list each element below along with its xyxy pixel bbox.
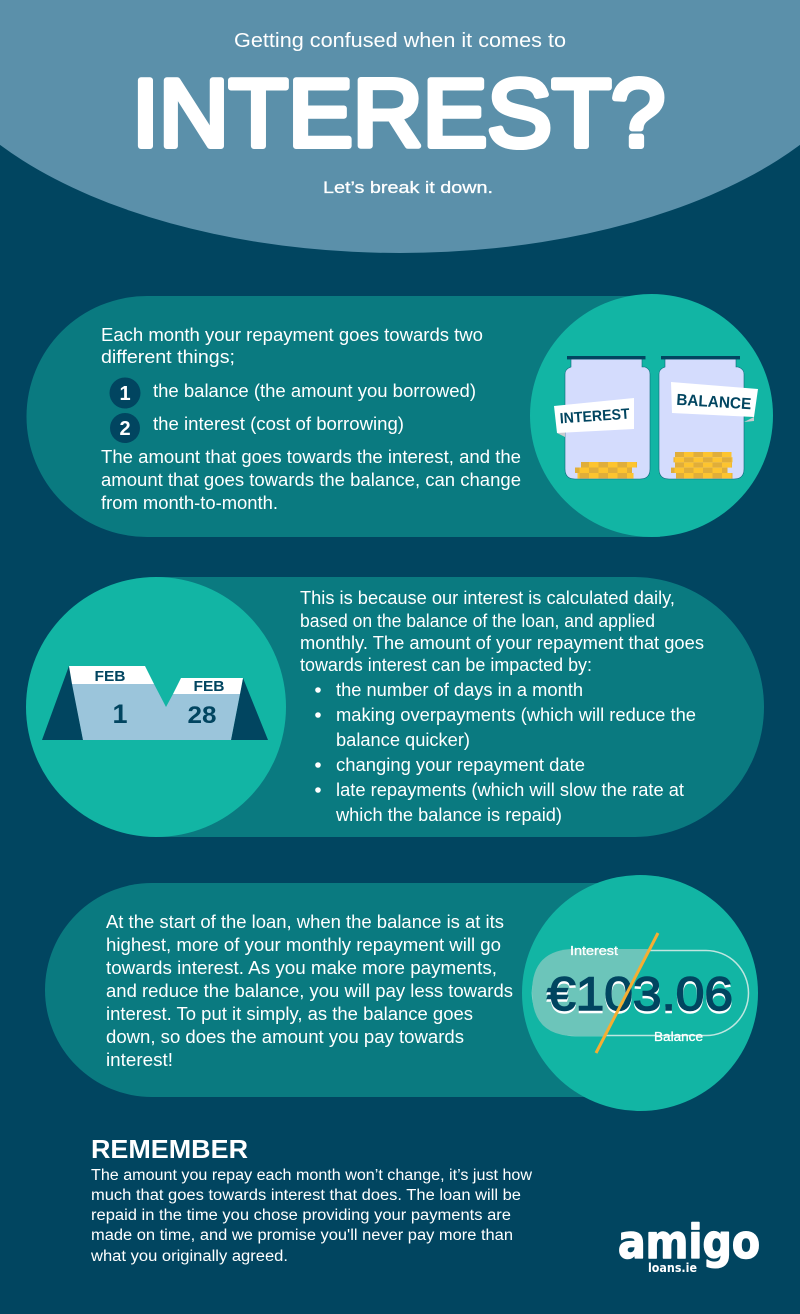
interest jar: INTEREST	[559, 406, 630, 427]
logo: amigo loans.ie: loans.ie	[648, 1260, 697, 1275]
panel 2 intro text	[300, 588, 704, 675]
balance jar: BALANCE	[676, 392, 752, 413]
balance jar	[659, 356, 758, 479]
bullet list: late repayments (which will slow the rate at	[336, 780, 684, 800]
panel 1 closing text: The amount that goes towards the interest, and the	[101, 447, 521, 467]
remember heading: REMEMBER	[91, 1134, 248, 1164]
panel 3 text: and reduce the balance, you will pay less towards	[106, 981, 513, 1001]
panel 1 closing text: amount that goes towards the balance, can change	[101, 470, 521, 490]
icon: repayment split pill: €103.06	[547, 967, 733, 1020]
remember text: made on time, and we promise you'll never pay more than	[91, 1227, 513, 1244]
remember text: repaid in the time you chose providing your payments are	[91, 1207, 511, 1224]
panel 2 intro text: based on the balance of the loan, and applied	[300, 611, 655, 631]
list item 2: the interest (cost of borrowing)	[153, 414, 404, 434]
panel 3 text: interest. To put it simply, as the balance goes	[106, 1004, 473, 1024]
icon: repayment split pill	[522, 875, 758, 1111]
panel 3 text: interest!	[106, 1050, 173, 1070]
icon: two jars with coins	[530, 294, 773, 537]
icon: repayment split pill: €103.06	[547, 970, 733, 1022]
bullet list: changing your repayment date	[336, 755, 585, 775]
icon: calendar pages: 1	[112, 699, 128, 729]
remember text	[90, 1167, 533, 1265]
logo: amigo loans.ie: amigo	[618, 1215, 760, 1269]
icon: repayment split pill: Interest	[570, 943, 618, 958]
bullet list	[315, 680, 696, 825]
bullet list: which the balance is repaid)	[335, 805, 562, 825]
panel 1 intro text	[101, 325, 483, 367]
header sub line: Let’s break it down.	[323, 178, 493, 197]
panel 1 closing text: from month-to-month.	[101, 493, 278, 513]
number badge 2	[110, 413, 140, 443]
interest jar	[554, 356, 650, 479]
panel: how interest is calculated	[156, 577, 764, 837]
header intro line: Getting confused when it comes to	[234, 30, 566, 52]
panel 2 intro text: monthly. The amount of your repayment that goes	[300, 633, 704, 653]
bullet list: making overpayments (which will reduce the	[336, 705, 696, 725]
number badge 2: 2	[119, 418, 131, 440]
bullet list: balance quicker)	[336, 730, 470, 750]
list item 1: the balance (the amount you borrowed)	[153, 381, 476, 401]
remember text: what you originally agreed.	[90, 1248, 288, 1265]
icon: calendar pages: FEB	[94, 668, 126, 685]
bullet list: the number of days in a month	[336, 680, 583, 700]
remember text: much that goes towards interest that does. The loan will be	[91, 1187, 521, 1204]
panel 3 text: towards interest. As you make more payments,	[106, 958, 497, 978]
icon: calendar pages	[26, 577, 286, 837]
panel 1 intro text: Each month your repayment goes towards two	[101, 325, 483, 345]
panel 1 closing text	[101, 447, 521, 513]
number badge 1	[110, 378, 140, 408]
panel 3 text	[106, 912, 513, 1070]
panel 2 intro text: This is because our interest is calculated daily,	[300, 588, 675, 608]
panel 1 intro text: different things;	[101, 347, 235, 367]
panel: start of the loan	[45, 883, 640, 1097]
panel 2 intro text: towards interest can be impacted by:	[300, 655, 592, 675]
header: curved banner	[0, 0, 800, 253]
icon: calendar pages: FEB	[194, 678, 225, 695]
icon: repayment split pill: Balance	[654, 1029, 703, 1044]
panel 3 text: At the start of the loan, when the balance is at its	[106, 912, 504, 932]
remember text: The amount you repay each month won’t change, it’s just how	[91, 1167, 533, 1184]
title: INTEREST?	[132, 60, 665, 167]
number badge 1: 1	[119, 383, 131, 405]
panel: repayment split	[27, 296, 660, 537]
panel 3 text: down, so does the amount you pay towards	[106, 1027, 464, 1047]
panel 3 text: highest, more of your monthly repayment will go	[106, 935, 501, 955]
icon: calendar pages: 28	[188, 702, 216, 729]
